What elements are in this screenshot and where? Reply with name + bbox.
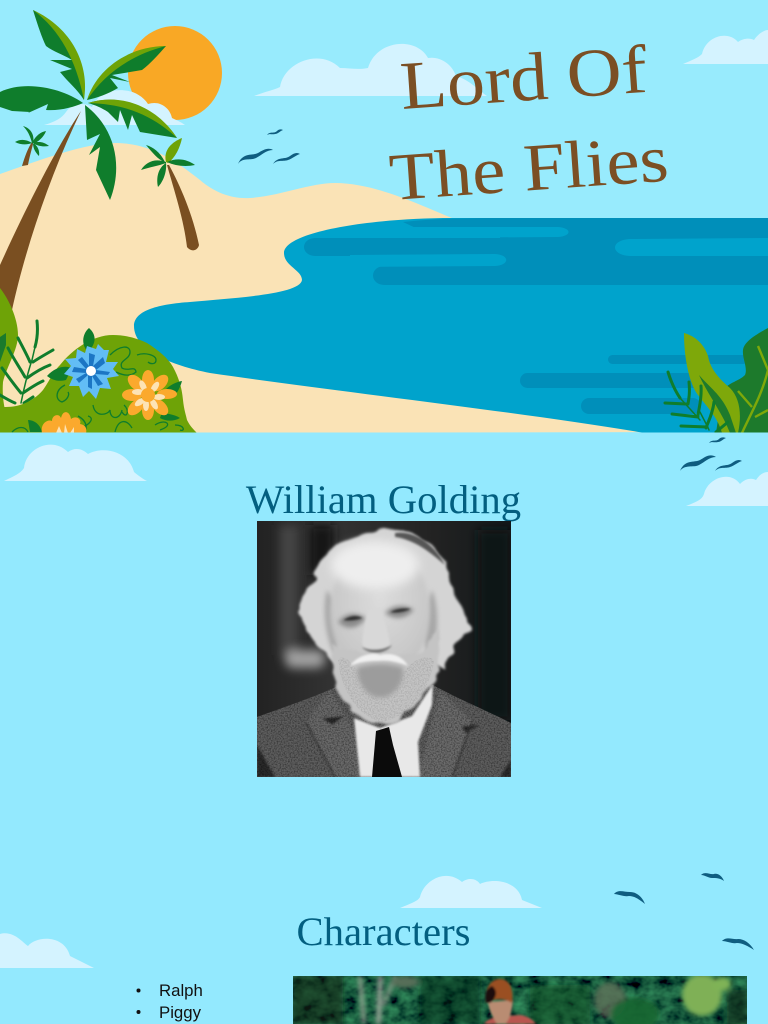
sky [0,0,768,433]
moustache [350,654,408,666]
icon: sun [128,26,222,120]
lower wave bands [520,355,748,414]
sand beach [0,143,640,432]
dark green large leaf [716,328,768,433]
cloud top centre [254,44,487,96]
cloud right mid [686,472,768,506]
eye sockets [338,606,414,628]
dark wave mass [304,218,768,285]
palm frond left [0,86,83,113]
beard texture [338,657,434,722]
photo: boy in the jungle [293,974,747,1024]
list item: Piggy: Piggy [159,1003,202,1022]
leaf veins [738,346,768,433]
heading: Characters: Characters [297,909,470,954]
hair [298,530,472,668]
chin tuft [357,664,403,698]
character list [136,981,203,1022]
photo: William Golding portrait [257,521,511,777]
nose shadow [362,645,392,653]
face [330,546,430,678]
jacket lapels and shadows [257,690,511,777]
foliage [293,974,747,1024]
cloud behind palm [44,90,185,125]
small distant palm [15,126,49,166]
title [387,31,671,215]
bush mound [0,335,197,433]
nose [362,608,390,652]
title line: Lord Of: Lord Of [398,31,650,124]
jacket [257,685,511,777]
cloud top right [683,30,768,64]
portrait backdrop [257,521,511,777]
hair top dark wisps [395,533,445,565]
backdrop details [280,525,511,720]
boy torso [484,1015,536,1024]
large palm tree [0,10,177,322]
boy hair shadow [485,986,496,1003]
icon: blue flower [64,344,119,399]
heading: William Golding: William Golding [246,477,521,522]
small fern right [665,372,728,432]
sea waves [304,218,768,414]
palm frond up-right [87,46,166,100]
flowering bush [0,328,197,433]
light wave pocket mid [350,254,506,267]
list item: Ralph: Ralph [159,981,203,1000]
icon: orange flower [122,370,177,420]
hair shadows by the ears [325,590,437,665]
fern [0,321,53,403]
cloud lower left [0,933,94,968]
birds right mid [680,437,742,471]
title line: The Flies: The Flies [387,122,671,215]
sea water [134,218,768,433]
forehead highlight [331,541,419,589]
light wave pocket upper [414,227,568,238]
palm frond right [88,100,177,138]
right foreground plants [665,328,768,433]
palm frond up-left [33,10,84,100]
light wave pocket right [615,238,768,256]
icon: lower orange flower [42,412,86,433]
jacket tweed texture [257,685,511,777]
tie [372,727,402,777]
birds upper [238,129,300,164]
boy hair [486,979,512,1003]
panel: beach header illustration [0,0,768,433]
boy face [488,1000,513,1024]
boy [484,979,536,1024]
birds lower right [614,873,754,950]
bush line doodles [12,347,183,432]
cloud lower centre [400,876,542,908]
beard [332,630,438,725]
jungle backdrop [293,976,747,1024]
shirt and collar [354,684,433,777]
bush leaves [28,328,182,432]
eyes [344,609,410,620]
olive leaf [684,333,740,433]
palm frond down [85,105,116,200]
left foreground leaf [0,288,18,410]
small palm on dune [141,138,199,250]
cloud left mid [4,445,147,481]
palm trunk [0,111,81,322]
